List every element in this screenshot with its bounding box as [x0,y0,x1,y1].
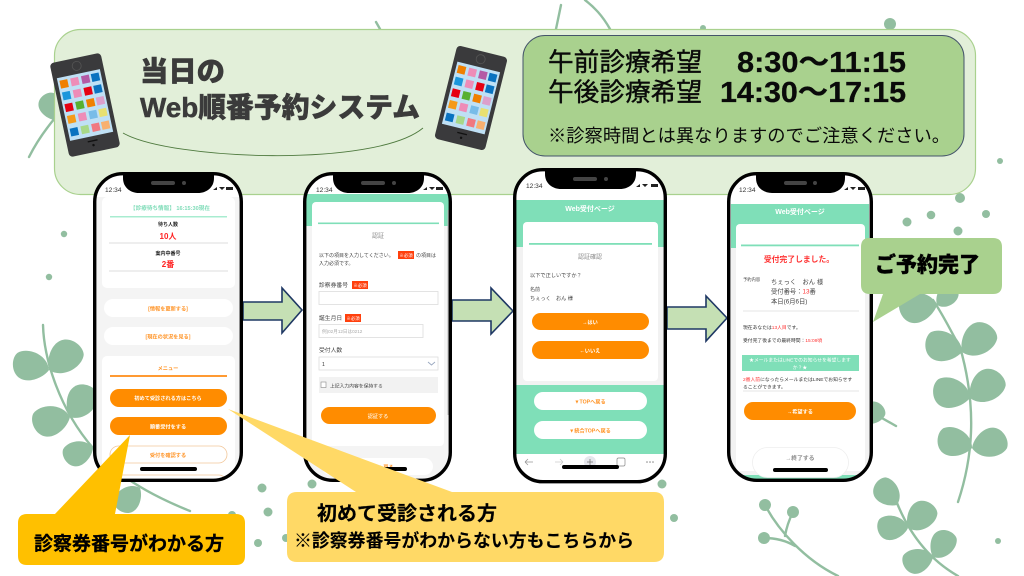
phone 3: confirmation page: Web受付ページ [565,204,615,213]
phone 1: waiting info and menu: [現在の状況を見る] [146,332,191,340]
phone 3: confirmation page: 名前 [530,286,540,293]
phone 4: reservation complete: 受付番号：13番 [771,286,816,296]
phone 2: authentication form: 受付人数 [319,346,342,354]
phone 4: reservation complete: 本日(6月6日) [771,296,807,306]
phone 4: reservation complete: 受付完了しました。 [764,254,834,264]
arrow: step 2 to 3 [452,288,513,334]
callout: first-time patient [228,409,664,562]
phone 2: authentication form: の項目は [416,253,436,259]
phone 2: authentication form: 認証 [372,233,384,240]
phone 2: authentication form: 例)02月12日は0212 [322,328,363,335]
phone 2: authentication form: 診察券番号 [319,281,348,289]
phone 4: reservation complete: Web受付ページ [775,207,825,216]
callout: patient number known: 診察券番号がわかる方 [34,532,224,555]
phone 2: authentication form [305,174,450,480]
phone 4: reservation complete: ることができます。 [743,384,786,390]
phone 4: reservation complete: →終了する [786,454,815,462]
arrow: step 1 to 2 [243,288,302,333]
callout: patient number known [18,435,245,565]
panel: header banner [54,30,976,194]
phone 2: authentication form: ▼TOPへ戻る [362,464,394,471]
phone 4: reservation complete: 2番人前になったらメールまたはLINEでお知らせす [743,376,852,383]
phone 2: authentication form: ※必須 [353,282,367,289]
phone 2: authentication form: 認証する [368,413,388,420]
panel: reception hours: 午後診療希望 [548,79,702,107]
phone 3: confirmation page [515,170,665,484]
callout: reservation complete: ご予約完了 [875,253,980,277]
phone 4: reservation complete: 現在あなたは13人目です。 [743,324,801,331]
phone 2: authentication form: ※必須 [346,315,360,322]
phone 2: authentication form: 入力必須です。 [319,260,354,267]
phone 1: waiting info and menu: 10人 [160,232,176,241]
arrow: step 3 to 4 [667,296,727,341]
phone 1: waiting info and menu: 2番 [162,259,174,269]
phone 4: reservation complete [729,174,871,480]
title underline curve [123,128,423,156]
phone 3: confirmation page: ▼統合TOPへ戻る [569,426,611,434]
phone 1: waiting info and menu: 案内中番号 [155,250,181,257]
phone 4: reservation complete: 予約内容 [743,276,761,283]
phone 4: reservation complete: ★メールまたはLINEでのお知らせを希望します [749,356,851,364]
phone 3: confirmation page: 12:34 [526,183,543,190]
phone 2: authentication form: 誕生月日 [319,314,342,322]
phone 4: reservation complete: か？★ [793,364,807,371]
phone 1: waiting info and menu: 待ち人数 [158,221,178,228]
phone 1: waiting info and menu [95,174,241,492]
phone 1: waiting info and menu: 初めて受診される方はこちら [134,394,202,402]
panel: reception hours: 8:30～11:15 [737,47,906,79]
phone 1: waiting info and menu: [情報を更新する] [148,304,188,312]
panel: reception hours: ※診察時間とは異なりますのでご注意ください。 [548,125,950,146]
heading: title [140,56,420,123]
phone 3: confirmation page: 以下で正しいですか？ [530,272,582,279]
phone 2: authentication form: 1 [322,362,325,368]
phone 4: reservation complete: 受付完了後までの最終時間：15:09頃 [743,337,822,344]
phone 2: authentication form: 以下の項目を入力してください。 [319,252,394,259]
panel: reception hours: 午前診療希望 [548,49,702,77]
phone 1: waiting info and menu: 順番受付をする [150,422,186,430]
callout: reservation complete [861,238,1002,322]
panel: reception hours [523,36,964,156]
phone 4: reservation complete: ちぇっく おん 様 [771,277,824,286]
callout: first-time patient: 初めて受診される方 [317,502,497,525]
phone 3: confirmation page: 認証確認 [578,253,602,261]
panel: reception hours: 14:30～17:15 [720,77,906,109]
phone 3: confirmation page: →はい [582,319,598,326]
heading: title: Web順番予約システム [140,92,420,123]
phone 4: reservation complete: 12:34 [739,187,756,194]
phone 1: waiting info and menu: 【診療待ち情報】 16:15:30現在 [130,204,210,212]
phone 2: authentication form: 12:34 [316,187,333,194]
phone 2: authentication form: 上記入力内容を保持する [330,382,383,390]
icon: smartphone right [434,45,508,151]
icon: smartphone left [50,53,120,157]
phone 1: waiting info and menu: 受付を確認する [150,451,186,459]
phone 3: confirmation page: ▼TOPへ戻る [574,398,606,406]
phone 1: waiting info and menu: 12:34 [105,187,122,194]
phone 2: authentication form: ※必須 [399,252,413,259]
phone 1: waiting info and menu: メニュー [158,365,178,372]
phone 4: reservation complete: →希望する [787,408,813,416]
phone 3: confirmation page: ←いいえ [580,348,600,354]
callout: first-time patient: ※診察券番号がわからない方もこちらから [294,530,634,551]
heading: title: 当日の [140,56,225,87]
phone 3: confirmation page: ちぇっく おん 様 [530,294,574,302]
